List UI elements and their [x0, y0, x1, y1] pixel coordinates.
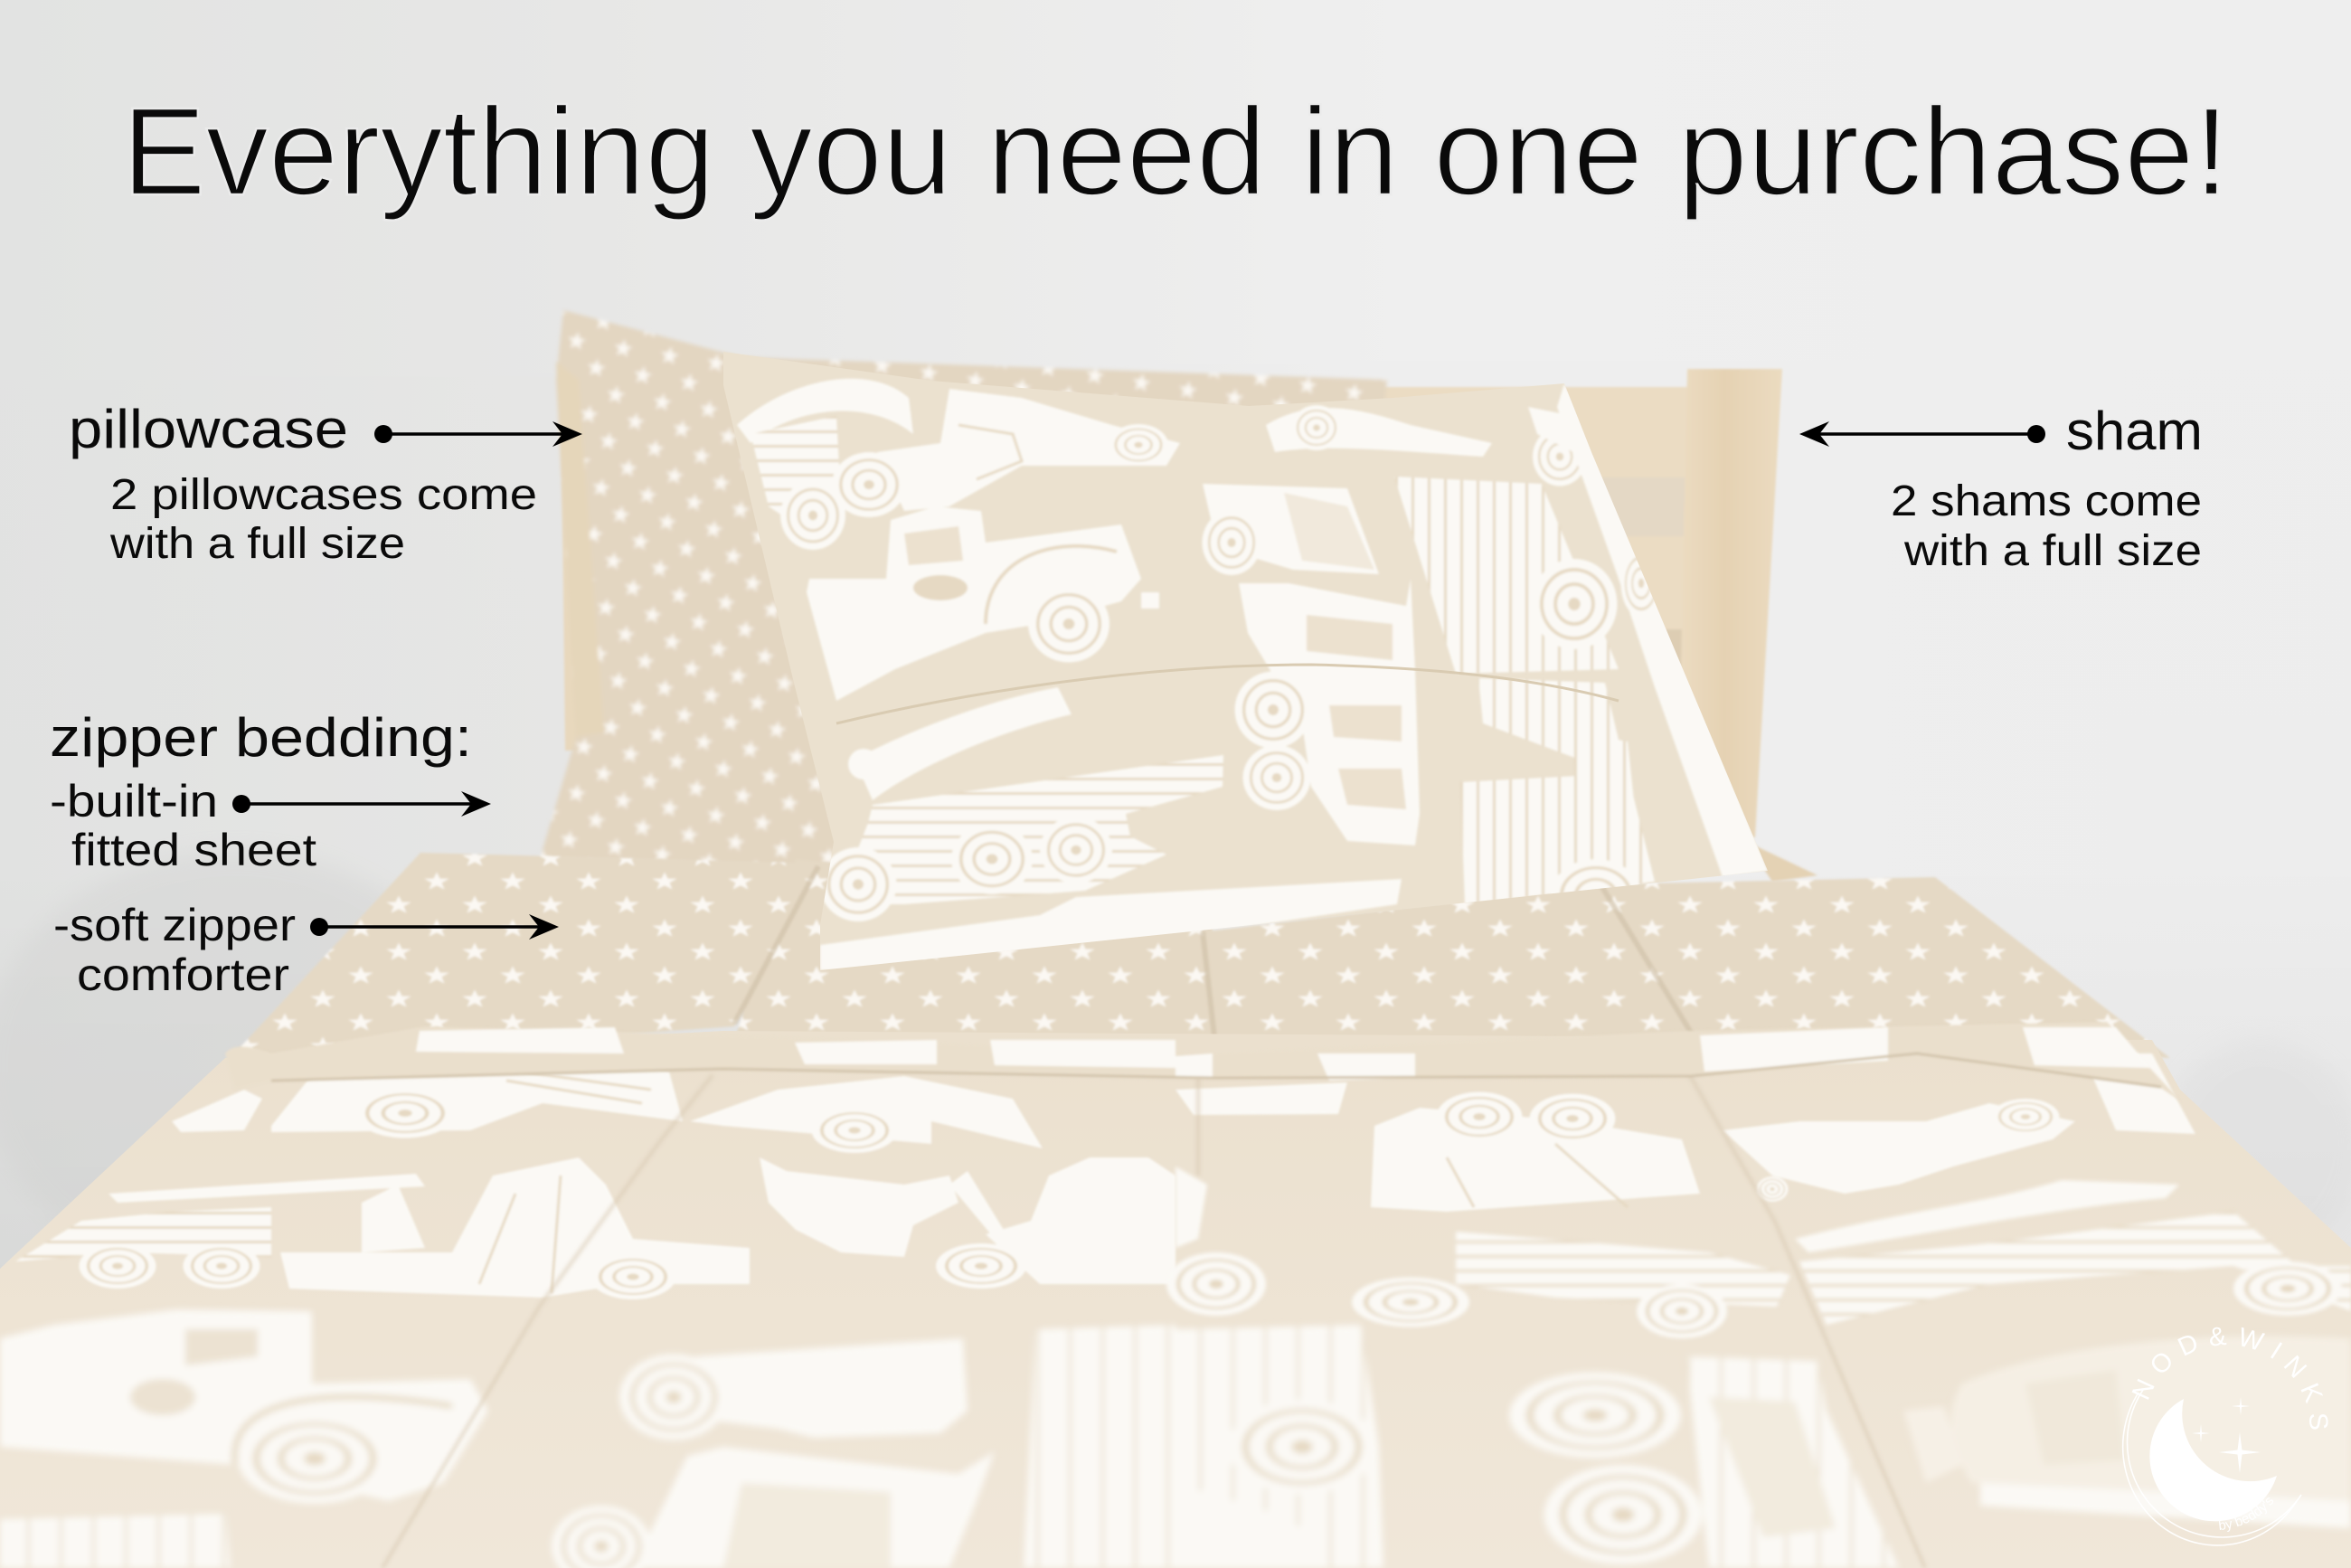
- logo wordmark: NOD&WINKS: [2132, 1327, 2327, 1429]
- callout: zipper bedding: zipper bedding:: [50, 707, 472, 768]
- comforter print: rear row, in focus: [15, 1049, 2195, 1299]
- logo sparkles: [2192, 1397, 2261, 1473]
- logo crescent moon: [2149, 1399, 2277, 1521]
- comforter quilt seams: [382, 1068, 1925, 1568]
- excavator: [760, 1157, 1176, 1289]
- fold of comforter with star lining: [226, 853, 2170, 1063]
- callout: sham: with a full size: [1903, 527, 2202, 575]
- comforter fold lip: [225, 1022, 2181, 1101]
- truck G striped column: [1024, 1325, 1185, 1568]
- truck: top left hauler: [737, 379, 1180, 550]
- excavator wheels: [1166, 1167, 1266, 1316]
- arrow: pillowcase: [374, 421, 582, 447]
- truck O right foreground: [1903, 1336, 2351, 1528]
- print: center fragment: [1176, 1053, 2195, 1134]
- truck H corner fragment: [0, 1514, 231, 1568]
- truck: striped bed, right: [1394, 477, 1619, 674]
- truck: lower right: [1460, 773, 1655, 931]
- truck: central vertical: [1203, 484, 1420, 845]
- logo byline: by beddy's: [2219, 1497, 2273, 1532]
- arrow: sham: [1799, 421, 2045, 447]
- logo rings: [2123, 1390, 2301, 1545]
- title: Everything you need in one purchase!: [122, 82, 2229, 222]
- callout: pillowcase: pillowcase: [69, 399, 348, 459]
- truck I rear right: [1371, 1092, 1700, 1212]
- callout: zipper bedding: -soft zipper: [53, 900, 296, 950]
- callout: sham: sham: [2066, 401, 2203, 461]
- fold panel: center left: [734, 859, 1216, 1053]
- sham: pocket seam: [836, 665, 1619, 723]
- sham: bottom track band: [820, 879, 1402, 970]
- wooden headboard: [561, 362, 1818, 882]
- callout: zipper bedding: fitted sheet: [71, 825, 316, 875]
- callout: zipper bedding: comforter: [77, 949, 289, 1000]
- truck: upper right fragment: [1266, 405, 1591, 486]
- truck F center foreground: [552, 1338, 995, 1568]
- comforter print: front rows, out of focus: [1166, 1167, 2351, 1338]
- sham pillow with truck print: [705, 344, 1790, 995]
- callout: pillowcase: with a full size: [109, 520, 405, 568]
- truck K long hauler middle: [1352, 1232, 1790, 1338]
- arrow: soft zipper comforter: [310, 914, 559, 940]
- truck A: [172, 1049, 683, 1138]
- truck E pickup foreground: [0, 1309, 488, 1504]
- back pillowcase with stars: [540, 310, 1387, 868]
- truck: pickup: [807, 506, 1159, 701]
- fold panel: right: [1600, 877, 2170, 1058]
- arrow: built-in fitted sheet: [232, 791, 491, 817]
- truck N wheels and cab: [1509, 1356, 1899, 1568]
- logo: Nod & Winks by beddy's: [2121, 1327, 2327, 1546]
- truck C long hauler left: [15, 1157, 750, 1299]
- main comforter: [0, 1031, 2351, 1568]
- callout: sham: [1799, 401, 2203, 575]
- callout: zipper bedding: -built-in: [50, 776, 218, 827]
- truck: mid right: [1478, 677, 1633, 792]
- truck B: [690, 1076, 1043, 1153]
- fold panel: center right: [1199, 884, 1691, 1053]
- callout: pillowcase: 2 pillowcases come: [110, 471, 537, 519]
- fold panel: left: [226, 853, 827, 1063]
- callout: sham: 2 shams come: [1891, 477, 2202, 525]
- truck M stripes and wheels: [1176, 1325, 1383, 1568]
- truck L long hauler right: [1795, 1180, 2351, 1325]
- truck: crane and flatbed: [819, 687, 1223, 921]
- sham: right edge print: [1557, 383, 1768, 877]
- callout: zipper bedding: [50, 707, 559, 1000]
- truck J: [1723, 1099, 2075, 1202]
- callout: pillowcase: [69, 399, 582, 568]
